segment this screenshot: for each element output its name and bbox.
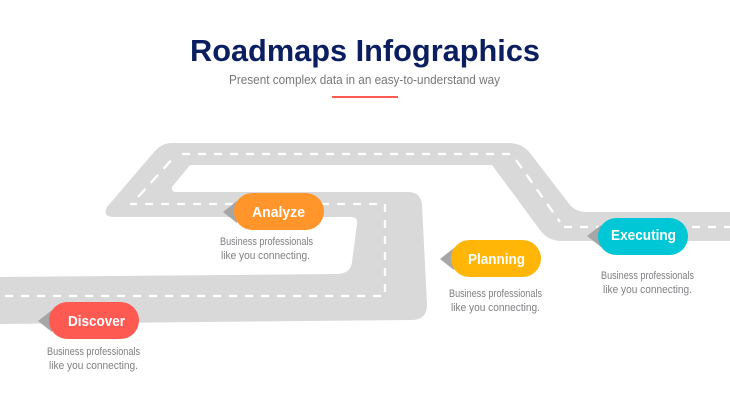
description: Planning: Business professionals [449,288,542,300]
description: Executing [601,270,694,296]
road [0,143,730,324]
pointer: Analyze [223,201,237,223]
description: Discover: Business professionals [47,346,140,358]
pointer: Discover [38,310,52,332]
description: Planning: like you connecting. [451,302,540,314]
title: Roadmaps Infographics [190,33,540,68]
description: Analyze: Business professionals [220,236,313,248]
pill: Analyze [234,193,324,230]
pill: Planning [451,240,541,277]
description: Discover [47,346,140,372]
title underline [332,96,398,98]
description: Executing: like you connecting. [603,284,692,296]
label: Planning: Planning [468,251,525,268]
description: Executing: Business professionals [601,270,694,282]
pointer: Executing [587,225,601,247]
description: Analyze: like you connecting. [221,250,310,262]
description: Analyze [220,236,313,262]
step: Discover [38,302,140,372]
pointer: Planning [440,248,454,270]
label: Discover: Discover [68,313,125,330]
subtitle: Present complex data in an easy-to-understand way [229,73,501,87]
step: Executing [587,218,694,296]
description: Planning [449,288,542,314]
label: Analyze: Analyze [252,204,305,221]
step: Planning [440,240,542,314]
description: Discover: like you connecting. [49,360,138,372]
pill: Executing [598,218,688,255]
label: Executing: Executing [611,227,676,244]
pill: Discover [49,302,139,339]
step: Analyze [220,193,324,262]
